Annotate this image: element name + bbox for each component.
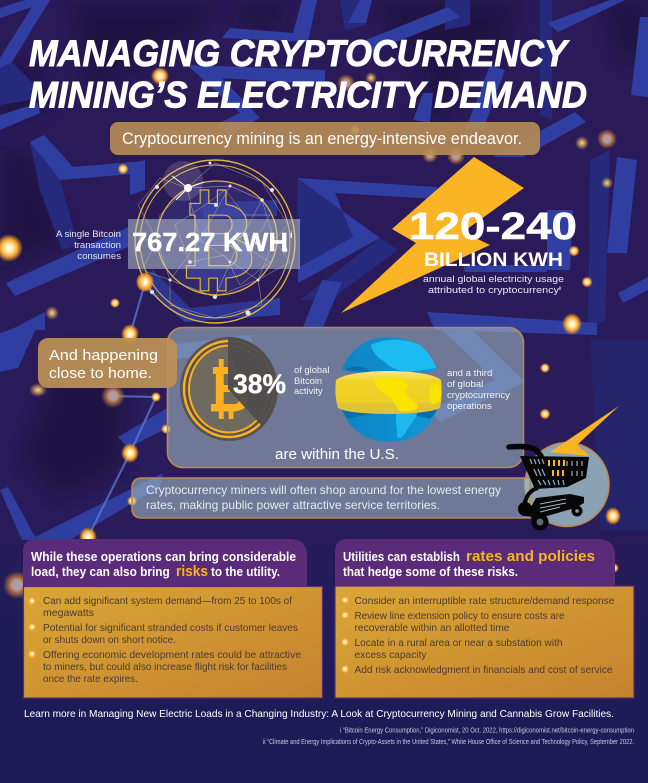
- subtitle banner: Cryptocurrency mining is an energy-intensive endeavor.: [122, 129, 522, 148]
- subtitle banner: [110, 122, 540, 155]
- stat: transaction energy: i: [290, 230, 293, 240]
- icon: bitcoin pie 38%: [180, 337, 286, 441]
- callout: close to home: [38, 338, 177, 388]
- list: risk bullets: Offering economic development rates could be attractive: [43, 650, 301, 661]
- icon: network bitcoin: [135, 160, 295, 323]
- callout: close to home: And happening: [49, 347, 158, 364]
- panel: risks: [23, 539, 322, 698]
- heading: policies: [335, 539, 615, 586]
- learn more line: Learn more in Managing New Electric Loads in a Changing Industry: A Look at Cryptocurrency Mining and Cannabis Grow Facilities.: [24, 709, 614, 720]
- label: global bitcoin activity: of global: [294, 364, 329, 375]
- heading: risks: load, they can also bring: [31, 565, 173, 579]
- list: policy bullets: Locate in a rural area or near a substation with: [354, 638, 563, 649]
- stat: global electricity usage: BILLION KWH: [424, 249, 563, 271]
- caption: within the U.S.: are within the U.S.: [275, 447, 399, 463]
- heading: risks: to the utility.: [211, 565, 280, 579]
- list: risk bullets: megawatts: [43, 608, 94, 619]
- list: risk bullets: once the rate expires.: [43, 674, 138, 685]
- list: policy bullets: [340, 595, 615, 676]
- icon: globe: [335, 337, 442, 442]
- icon: lightning bolt: [341, 157, 524, 313]
- stat: global electricity usage: [409, 206, 577, 296]
- footnotes: [263, 726, 634, 746]
- label: single transaction: A single Bitcoin: [56, 229, 121, 240]
- stat: transaction energy: 767.27 KWH: [132, 227, 288, 257]
- panel: shopping note: [132, 442, 609, 526]
- heading: risks: While these operations can bring considerable: [31, 550, 296, 564]
- label: single transaction: transaction: [74, 240, 121, 251]
- list: risk bullets: to miners, but could also increase flight risk for facilities: [43, 662, 287, 673]
- list: risk bullets: Can add significant system demand—from 25 to 100s of: [43, 596, 292, 607]
- list: policy bullets: Consider an interruptible rate structure/demand response: [354, 596, 615, 607]
- label: global bitcoin activity: activity: [294, 385, 323, 396]
- heading: risks: risks: [176, 564, 208, 580]
- heading: policies: that hedge some of these risks.: [343, 565, 518, 579]
- panel: within the U.S.: [168, 328, 524, 468]
- glow on coin: [136, 272, 154, 292]
- callout: close to home: close to home.: [49, 365, 152, 382]
- list: policy bullets: excess capacity: [354, 650, 427, 661]
- list: policy bullets: recoverable within an allotted time: [354, 623, 510, 634]
- list: policy bullets: Review line extension policy to ensure costs are: [354, 611, 565, 622]
- list: risk bullets: Potential for significant stranded costs if customer leaves: [43, 623, 298, 634]
- panel: rates and policies: [335, 539, 634, 698]
- stat: global electricity usage: 120-240: [409, 206, 577, 248]
- label: third of operations: cryptocurrency: [447, 390, 510, 401]
- list: risk bullets: [27, 596, 301, 685]
- label: third of operations: of global: [447, 379, 483, 390]
- stat: global electricity usage: annual global electricity usage: [423, 274, 564, 285]
- stat: global electricity usage: ii: [559, 286, 561, 292]
- icon: shopping cart: [509, 446, 589, 530]
- label: third of operations: and a third: [447, 368, 492, 379]
- list: policy bullets: Add risk acknowledgment in financials and cost of service: [354, 665, 613, 676]
- stat: transaction energy: [56, 219, 300, 269]
- label: global bitcoin activity: Bitcoin: [294, 375, 322, 386]
- heading: risks: [23, 539, 307, 586]
- label: third of operations: operations: [447, 401, 492, 412]
- label: single transaction: consumes: [77, 251, 121, 262]
- heading: policies: Utilities can establish: [343, 550, 463, 564]
- stat: global electricity usage: attributed to cryptocurrency: [428, 285, 559, 296]
- heading: policies: rates and policies: [466, 549, 595, 565]
- icon: bitcoin pie 38%: 38%: [233, 369, 286, 399]
- icon: cart bolt: [550, 406, 619, 456]
- title: [29, 33, 587, 116]
- panel: shopping note: Cryptocurrency miners will often shop around for the lowest energy: [146, 483, 501, 497]
- list: risk bullets: or shuts down on short notice.: [43, 635, 176, 646]
- glow links: [88, 283, 156, 537]
- title: MANAGING CRYPTOCURRENCY: [29, 33, 570, 74]
- panel: shopping note: rates, making public power attractive service territories.: [146, 498, 440, 512]
- title: MINING’S ELECTRICITY DEMAND: [29, 74, 587, 116]
